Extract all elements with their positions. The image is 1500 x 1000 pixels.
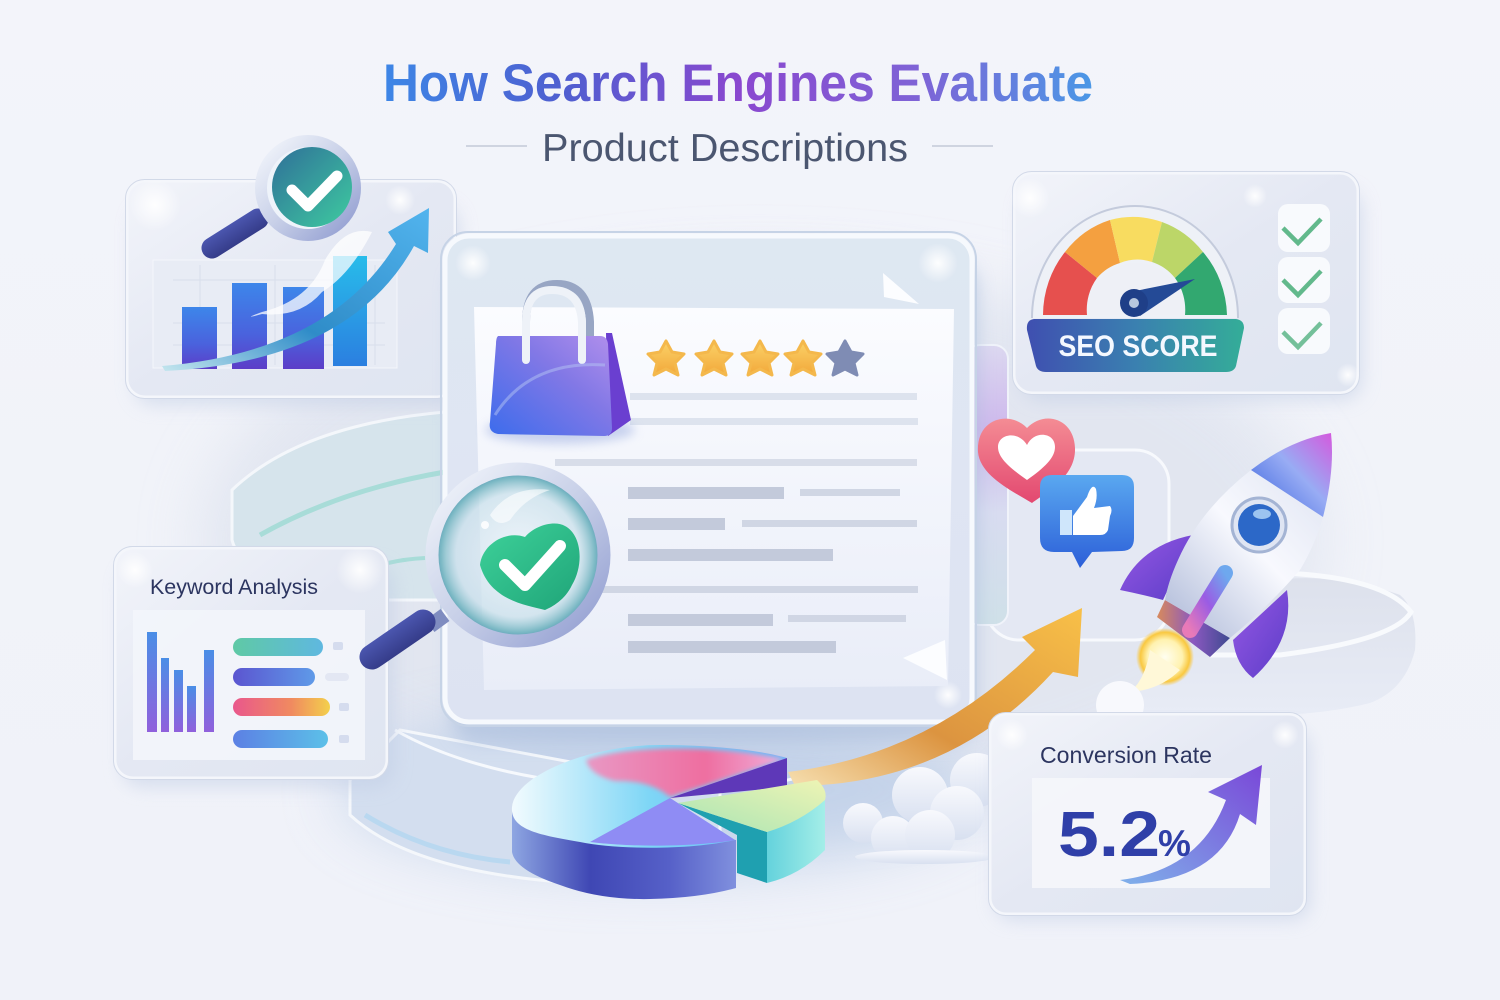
- rear glass panel: [985, 450, 1169, 640]
- pie chart: [512, 745, 826, 899]
- percent sign: %: [1158, 823, 1191, 864]
- purple glass strip: [966, 345, 1008, 625]
- bar chart: [182, 256, 367, 369]
- heading: Conversion Rate: [1040, 742, 1212, 768]
- panel: keyword analysis: [114, 546, 394, 787]
- panel: conversion rate: [988, 712, 1310, 920]
- arrow: conversion: [1120, 765, 1262, 884]
- SEO score band: [1027, 319, 1244, 372]
- white swoosh: [251, 231, 372, 317]
- glass bowl: [1130, 578, 1415, 716]
- pie slice: [678, 780, 826, 883]
- SEO score band: SEO SCORE: [1058, 330, 1218, 363]
- icon: rocket: [1120, 433, 1332, 692]
- panel: SEO score: [1010, 172, 1362, 400]
- title: How Search Engines Evaluate: [383, 54, 1093, 113]
- value: 5.2: [1058, 798, 1160, 870]
- gauge: [1032, 206, 1238, 318]
- icon: magnifier with check: [212, 141, 355, 248]
- document page: [474, 273, 954, 690]
- panel: growth chart: [126, 141, 459, 405]
- panel: central document: [441, 232, 977, 742]
- horizontal bars: [233, 638, 349, 748]
- platform: glass rings behind document: [232, 345, 1415, 885]
- subtitle: Product Descriptions: [542, 127, 908, 170]
- icon: clouds: [843, 681, 1144, 864]
- arrow: growth: [162, 208, 429, 371]
- star rating: [648, 341, 863, 375]
- heading: Keyword Analysis: [150, 576, 318, 599]
- text lines: [555, 393, 918, 653]
- arrow: orange growth arrow: [788, 608, 1082, 786]
- icon: heart badge: [978, 418, 1075, 503]
- pie inner wall: [670, 758, 787, 798]
- icon: large magnifier: [372, 469, 604, 657]
- icon: shopping bag: [485, 284, 635, 444]
- icon: thumbs up badge: [1040, 475, 1134, 568]
- checklist: [1278, 204, 1330, 354]
- bar chart: [147, 632, 214, 732]
